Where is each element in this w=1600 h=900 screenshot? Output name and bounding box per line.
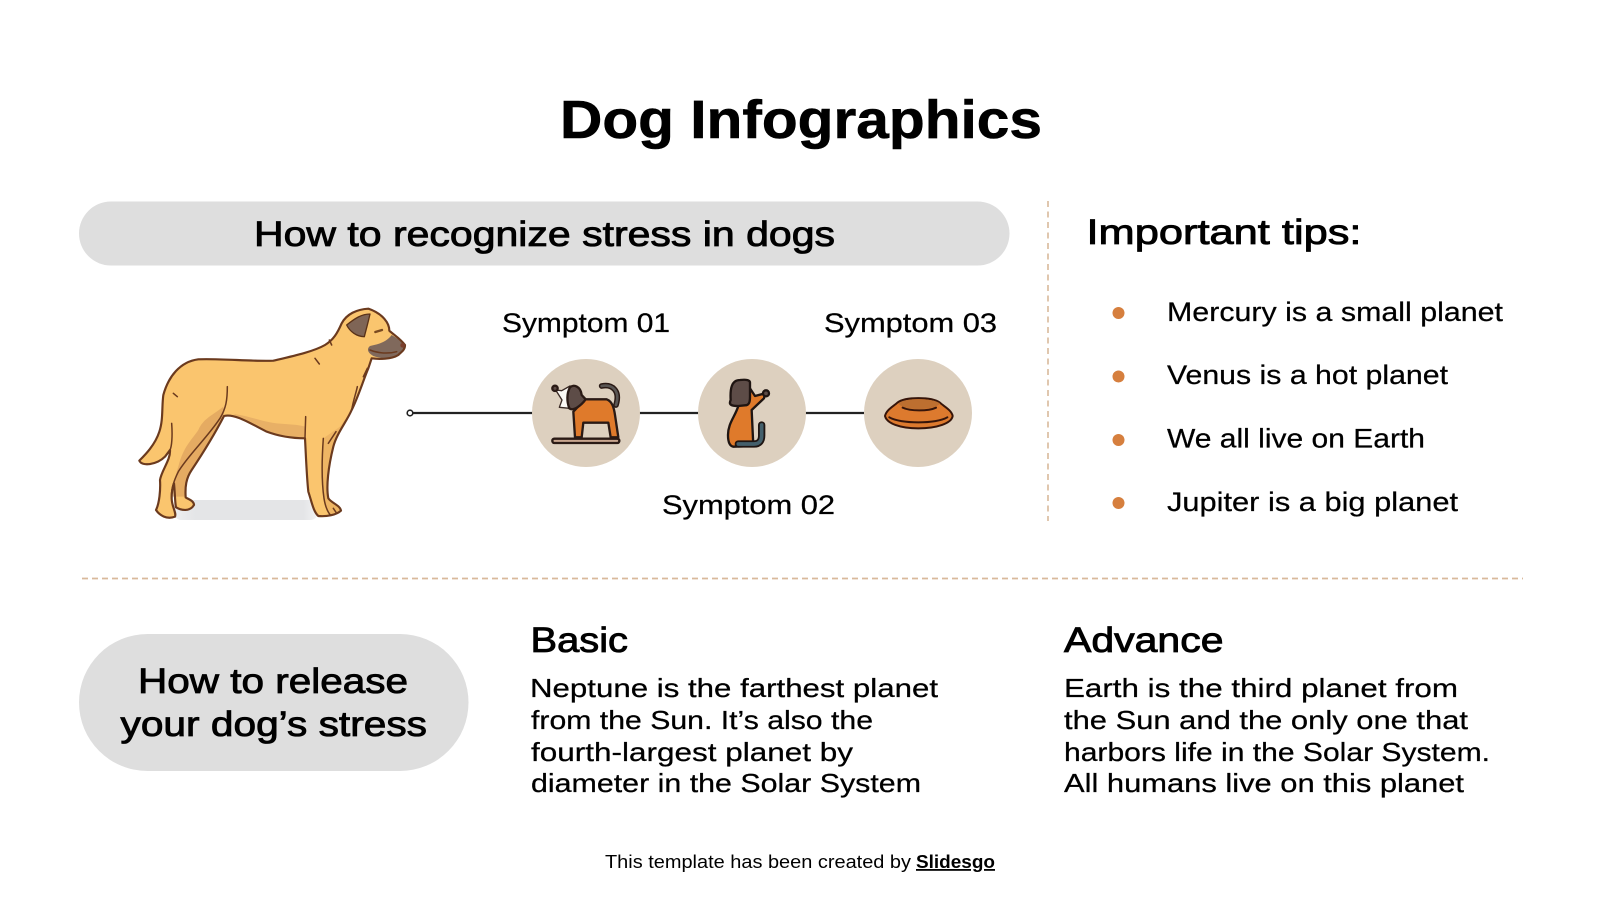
symptom 01 (502, 308, 670, 467)
label: symptom 02: Symptom 02 (662, 490, 835, 520)
text: advance description: harbors life in the Solar System. (1064, 737, 1490, 767)
column: advance (1064, 621, 1490, 798)
icon: sitting dog (728, 380, 769, 447)
divider: vertical dashed (1047, 201, 1049, 521)
text: basic description: diameter in the Solar System (531, 768, 921, 798)
text: advance description: Earth is the third planet from (1064, 673, 1458, 703)
text: basic description: fourth-largest planet by (531, 737, 853, 767)
column: basic (530, 621, 939, 798)
label: symptom 03: Symptom 03 (824, 308, 997, 338)
heading: release stress (120, 662, 427, 744)
label: symptom 01: Symptom 01 (502, 308, 670, 338)
text: advance description: the Sun and the only one that (1064, 705, 1469, 735)
illustration: standing dog (139, 309, 405, 520)
tip 4: Jupiter is a big planet (1167, 487, 1459, 517)
text: basic description (530, 673, 939, 798)
heading: basic: Basic (530, 621, 628, 660)
symptom connector line (407, 410, 864, 416)
text: basic description: from the Sun. It’s also the (531, 705, 873, 735)
panel: important tips (1086, 213, 1504, 517)
tip 1: Mercury is a small planet (1167, 297, 1504, 327)
symptom 03 (824, 308, 997, 467)
icon: dog on mat (552, 386, 619, 443)
text: basic description: Neptune is the farthest planet (530, 673, 939, 703)
heading: advance: Advance (1064, 621, 1224, 660)
heading: recognize stress: How to recognize stress in dogs (254, 215, 835, 254)
heading: important tips: Important tips: (1086, 213, 1362, 252)
title: Dog Infographics (560, 90, 1042, 150)
text: advance description: All humans live on this planet (1064, 768, 1465, 798)
divider: horizontal dashed (82, 578, 1523, 580)
text: advance description (1064, 673, 1490, 798)
heading: release stress: your dog’s stress (120, 705, 427, 744)
footer credit: Slidesgo (916, 852, 995, 872)
tip 2: Venus is a hot planet (1167, 360, 1449, 390)
panel: recognize stress heading pill (79, 202, 1010, 266)
panel: release stress pill (79, 634, 468, 771)
symptom 02 (662, 359, 835, 520)
tip 3: We all live on Earth (1167, 424, 1425, 454)
footer credit: This template has been created by (605, 852, 911, 872)
heading: release stress: How to release (138, 662, 408, 701)
icon: food bowl (885, 398, 953, 428)
